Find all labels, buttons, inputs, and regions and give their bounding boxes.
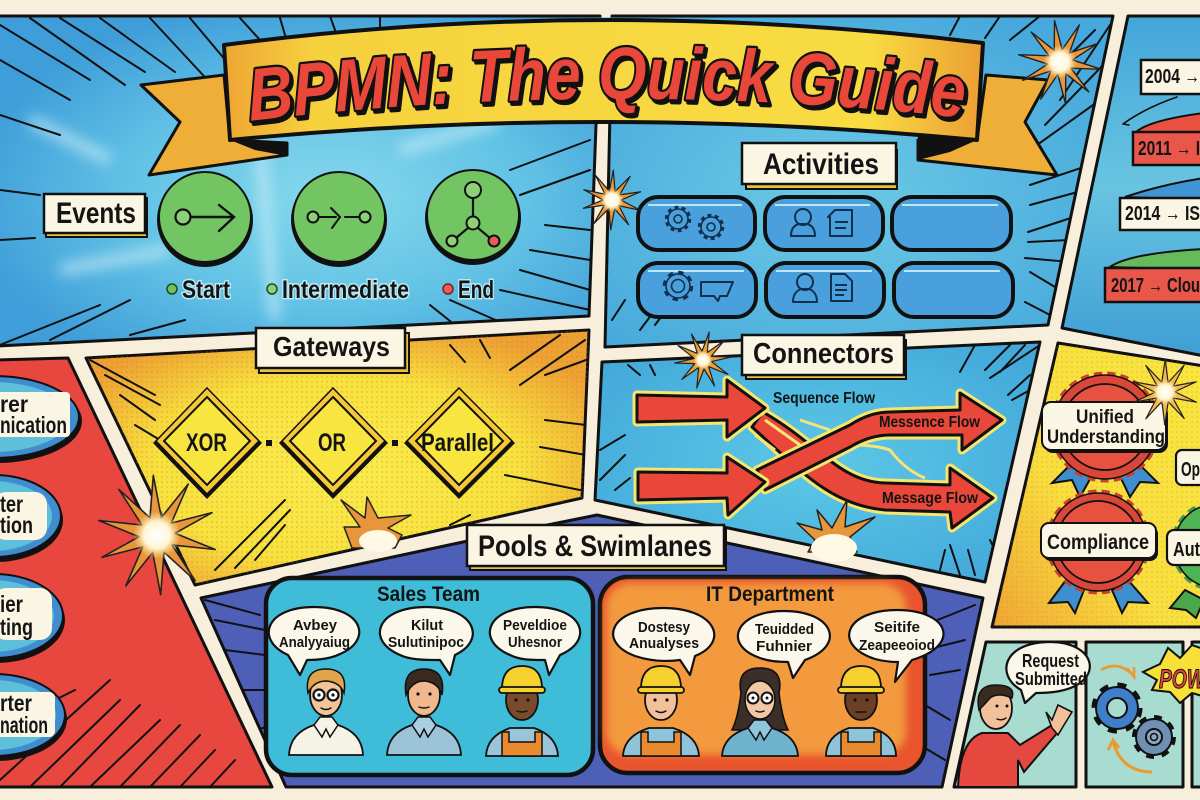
- burst: benefits: [1124, 352, 1200, 432]
- burst: events and activities: [574, 163, 650, 237]
- top gutter patch behind banner: [596, 18, 616, 40]
- benefit oval: faster iteration: tion: [0, 512, 33, 538]
- speed lines: [90, 335, 586, 570]
- speech bubble: IT 3: [849, 610, 943, 682]
- speech bubble: sales 2: Sulutinipoc: [388, 634, 464, 651]
- badge: Compliance: Compliance: [1047, 531, 1149, 554]
- panel: connectors: [595, 335, 1040, 582]
- label: Events: [44, 194, 147, 237]
- legend: End: [443, 276, 494, 304]
- benefit oval: easier reporting: ier: [0, 591, 23, 617]
- person: IT analyst with long hair and glasses: [722, 668, 798, 756]
- icon: start event: [157, 172, 253, 267]
- label: Connectors: [742, 335, 906, 379]
- badge: Automation (cropped): [1167, 504, 1200, 618]
- badge: Compliance: [1041, 493, 1158, 613]
- legend: End: End: [458, 276, 494, 304]
- speed lines: [0, 680, 235, 787]
- speed lines: [205, 600, 975, 760]
- person: IT technician with hard hat: [826, 666, 896, 756]
- panel: timeline: [1062, 16, 1200, 356]
- title text: BPMN: The Quick Guide: [249, 44, 968, 126]
- panel: benefits list: [0, 358, 272, 787]
- speech bubble: IT 3: Seitife: [874, 619, 920, 636]
- panel: comic strip: [954, 642, 1200, 787]
- title banner: [139, 18, 1058, 176]
- label: Events: Events: [56, 197, 136, 230]
- swimlane: IT Department: [600, 577, 943, 773]
- swimlane: IT Department: IT Department: [706, 583, 834, 606]
- ribbon main: [224, 20, 983, 140]
- speech bubble: IT 1: Anualyses: [629, 635, 699, 652]
- burst: POW: [1143, 645, 1200, 703]
- flow label: Sequence Flow: Sequence Flow: [773, 390, 875, 407]
- label: Activities: Activities: [763, 148, 879, 181]
- label: Gateways: [256, 328, 409, 373]
- speech bubble: IT 2: [738, 611, 830, 678]
- speech bubble: Request Submitted: Submitted: [1015, 669, 1087, 689]
- flow label: Message Flow: Message Flow: [882, 490, 978, 507]
- gateway: XOR: [153, 388, 262, 499]
- light streaks: [30, 120, 500, 320]
- activity: user task with form: [765, 197, 883, 250]
- panel: business benefits badges: [992, 343, 1200, 627]
- benefit oval: clearer communication: [0, 376, 82, 463]
- icon: end event: [425, 170, 521, 265]
- speech bubble: IT 1: Dostesy: [638, 619, 691, 636]
- legend: Start: [167, 276, 231, 304]
- gateway: XOR: XOR: [186, 429, 227, 457]
- badge: Optimization (cropped): [1176, 450, 1200, 485]
- ribbon fold shadows: [230, 136, 977, 160]
- benefit oval: smarter automation: nation: [0, 712, 48, 738]
- benefit oval: smarter automation: [0, 674, 67, 761]
- burst: connectors bottom: [797, 500, 875, 562]
- arrow: messence flow band: [757, 393, 1002, 490]
- activity: gear and message task: [638, 263, 756, 317]
- swimlane: Sales Team: [266, 578, 593, 775]
- timeline entry: 2014: [1120, 178, 1200, 230]
- lightning sparks: [755, 420, 925, 478]
- icon: blue gear: [1095, 686, 1139, 730]
- speed lines: [612, 16, 1110, 330]
- speech bubble: IT 2: Fuhnier: [756, 638, 812, 655]
- strip frame 1: [954, 642, 1076, 787]
- benefit oval: smarter automation: rter: [0, 690, 32, 716]
- ribbon tail: right: [918, 75, 1057, 175]
- gateway: OR: [279, 388, 388, 499]
- timeline entry: 2011: [1133, 113, 1200, 165]
- person: sales analyst with glasses: [289, 669, 363, 755]
- benefit oval: faster iteration: [0, 475, 63, 562]
- strip frame 3: [1192, 642, 1200, 787]
- speech bubble: sales 3: Uhesnor: [508, 634, 562, 651]
- arrow: 2004 to 2011: [1123, 97, 1177, 125]
- gateway: Parallel: [404, 388, 515, 499]
- speech bubble: IT 1: [613, 608, 714, 675]
- connector dots: [266, 440, 398, 446]
- speech bubble: IT 3: Zeapeeoiod: [859, 637, 935, 654]
- arrow: sequence flow bottom: [638, 457, 765, 515]
- badge: Unified Understanding: Understanding: [1047, 427, 1165, 448]
- label: Pools & Swimlanes: [467, 525, 726, 570]
- benefit oval: faster iteration: ter: [0, 491, 23, 517]
- arrow: sequence flow top: [637, 380, 765, 437]
- person: sales rep: [387, 669, 461, 755]
- icon: intermediate event: [291, 172, 387, 267]
- speed lines: [600, 345, 1040, 575]
- activity: empty task 2: [894, 263, 1013, 317]
- speech bubble: sales 1: Analyyaiug: [279, 634, 350, 651]
- benefit oval: clearer communication: nication: [0, 412, 67, 438]
- activity: service task: [638, 197, 755, 250]
- swimlane: Sales Team: Sales Team: [377, 583, 480, 606]
- burst: red panel: [85, 465, 229, 605]
- burst: gateway bottom: [341, 497, 411, 552]
- timeline entry: 2017: [1105, 249, 1200, 302]
- timeline entry: 2004: [1141, 60, 1200, 94]
- panel: events: [0, 16, 600, 346]
- speech bubble: sales 1: [269, 607, 359, 675]
- arrow: gears top: [1101, 666, 1134, 677]
- activity: user task with document: [766, 263, 884, 317]
- label: Activities: [742, 143, 897, 189]
- strip frame 2: [1086, 642, 1183, 787]
- ribbon tail: left: [141, 75, 287, 175]
- speech bubble: sales 1: Avbey: [293, 617, 338, 634]
- speech bubble: sales 2: Kilut: [411, 617, 443, 634]
- legend: Intermediate: Intermediate: [282, 276, 409, 304]
- speech bubble: Request Submitted: Request: [1022, 651, 1079, 671]
- gateway: Parallel: Parallel: [421, 429, 494, 457]
- speech bubble: sales 3: Peveldioe: [503, 617, 567, 634]
- gateway: OR: OR: [318, 429, 346, 457]
- arrow: message flow band: [752, 412, 993, 528]
- arrow: gears bottom: [1108, 740, 1152, 772]
- label: Gateways: Gateways: [273, 331, 390, 362]
- badge: Unified Understanding: [1042, 375, 1168, 497]
- label: Connectors: Connectors: [753, 338, 894, 370]
- benefit oval: clearer communication: rer: [0, 391, 28, 417]
- activity: empty task: [892, 197, 1011, 250]
- icon: grey gear: [1135, 718, 1173, 756]
- label: Pools & Swimlanes: Pools & Swimlanes: [478, 530, 712, 563]
- benefit oval: easier reporting: [0, 574, 65, 663]
- flow label: Messence Flow: Messence Flow: [879, 414, 980, 431]
- panel: activities: [605, 16, 1113, 347]
- legend: Start: Start: [182, 276, 231, 304]
- speech bubble: sales 2: [380, 607, 473, 675]
- speed lines: [0, 16, 590, 345]
- speech bubble: sales 3: [490, 607, 580, 675]
- speech bubble: IT 2: Teuidded: [755, 621, 814, 638]
- person: requester in red shirt: [958, 685, 1072, 787]
- person: IT engineer with hard hat: [623, 666, 699, 756]
- panel: gateways: [86, 328, 589, 585]
- burst: banner right: [1012, 15, 1108, 109]
- badge: Unified Understanding: Unified: [1076, 407, 1134, 428]
- panel: pools and swimlanes: [201, 515, 983, 787]
- person: sales engineer with hard hat: [486, 666, 558, 756]
- benefit oval: easier reporting: ting: [0, 614, 33, 640]
- burst: connectors top: [664, 322, 742, 398]
- speech bubble: Request Submitted: [1006, 642, 1090, 703]
